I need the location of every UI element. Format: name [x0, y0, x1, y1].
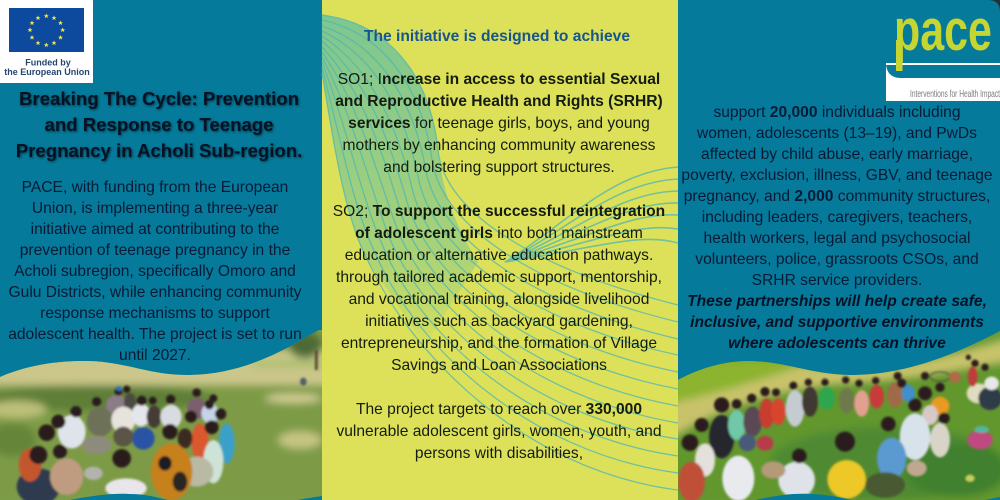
text block: project description: Acholi subregion, specifically Omoro and — [14, 263, 296, 280]
text block: strategic objectives: and vocational training, alongside livelihood — [349, 291, 649, 308]
title — [16, 88, 304, 164]
text block: project description: Gulu Districts, while enhancing community — [9, 284, 301, 301]
text block: project description: response mechanisms to support — [40, 305, 270, 322]
text block: project description: adolescent health. The project is set to run — [8, 326, 302, 343]
text block: project description: initiative aimed at contributing to the — [31, 221, 279, 238]
title: Breaking The Cycle: Prevention — [19, 88, 299, 109]
text block: project description: PACE, with funding from the European — [22, 179, 288, 196]
text block: strategic objectives: and Reproductive Health and Rights (SRHR) — [335, 93, 663, 110]
panel: centre yellow — [322, 0, 678, 500]
decorative wave pattern — [322, 15, 678, 490]
text block: project description: prevention of teenage pregnancy in the — [20, 242, 290, 259]
logo caption — [4, 58, 90, 77]
panel: left teal — [0, 0, 322, 500]
text block: project description: Union, is implementing a three-year — [32, 200, 278, 217]
text block: strategic objectives: SO1; Increase in access to essential Sexual — [338, 71, 660, 88]
text block: support targets: women, adolescents (13–19), and PwDs — [697, 125, 977, 142]
text block: strategic objectives: of adolescent girls into both mainstream — [355, 225, 643, 242]
seated people — [106, 395, 127, 415]
text block: strategic objectives: persons with disabilities, — [415, 445, 583, 462]
text block: strategic objectives: vulnerable adolescent girls, women, youth, and — [336, 423, 662, 440]
logo: PACE — [886, 0, 1000, 101]
text block: support targets: health workers, legal and psychosocial — [704, 230, 970, 247]
text block: support targets: affected by child abuse, early marriage, — [701, 146, 973, 163]
text block: strategic objectives: The project targets to reach over 330,000 — [356, 401, 642, 418]
heading: initiative goals: The initiative is designed to achieve — [364, 28, 630, 44]
photo: left group on grass — [0, 330, 343, 500]
text block: strategic objectives: and bolstering support structures. — [383, 159, 615, 176]
text block: strategic objectives: services for teenage girls, boys, and young — [348, 115, 650, 132]
text block: support targets: including leaders, caregivers, teachers, — [702, 209, 972, 226]
text block: strategic objectives: through tailored academic support, mentorship, — [336, 269, 662, 286]
text block: support targets: pregnancy, and 2,000 community structures, — [684, 188, 990, 205]
logo caption: Funded by — [25, 58, 71, 68]
heads — [29, 386, 226, 468]
heads — [682, 355, 989, 463]
text block: strategic objectives: education or alternative education pathways. — [345, 247, 653, 264]
text block: support targets: poverty, exclusion, illness, GBV, and teenage — [681, 167, 993, 184]
text block: support targets: SRHR service providers. — [752, 272, 922, 289]
photo: right group on grass — [663, 330, 1000, 500]
text block: project description — [8, 179, 302, 364]
seated people — [709, 415, 734, 458]
text block: support targets: inclusive, and supportive environments — [690, 314, 984, 331]
title: Pregnancy in Acholi Sub-region. — [16, 140, 302, 161]
text block: support targets: These partnerships will help create safe, — [687, 293, 987, 310]
text block: project description: until 2027. — [119, 347, 191, 364]
text block: strategic objectives: SO2; To support the successful reintegration — [333, 203, 665, 220]
text block: strategic objectives: Savings and Loan Associations — [391, 357, 607, 374]
text block: strategic objectives — [333, 71, 665, 462]
logo caption: the European Union — [4, 67, 90, 77]
text block: strategic objectives: entrepreneurship, and the formation of Village — [341, 335, 657, 352]
logo: European Union — [0, 0, 93, 83]
text block: strategic objectives: initiatives such as backyard gardening, — [365, 313, 633, 330]
text block: support targets — [681, 104, 993, 352]
text block: support targets: where adolescents can thrive — [728, 335, 946, 352]
icon: EU flag — [9, 8, 84, 52]
bottom wave — [755, 494, 1000, 500]
text block: strategic objectives: mothers by enhancing community awareness — [343, 137, 655, 154]
panel: right teal — [678, 0, 1000, 500]
text block: support targets: volunteers, police, grassroots CSOs, and — [695, 251, 979, 268]
title: and Response to Teenage — [44, 114, 274, 135]
bottom wave — [70, 494, 322, 500]
bicycle — [930, 372, 950, 381]
text block: support targets: support 20,000 individuals including — [713, 104, 961, 121]
